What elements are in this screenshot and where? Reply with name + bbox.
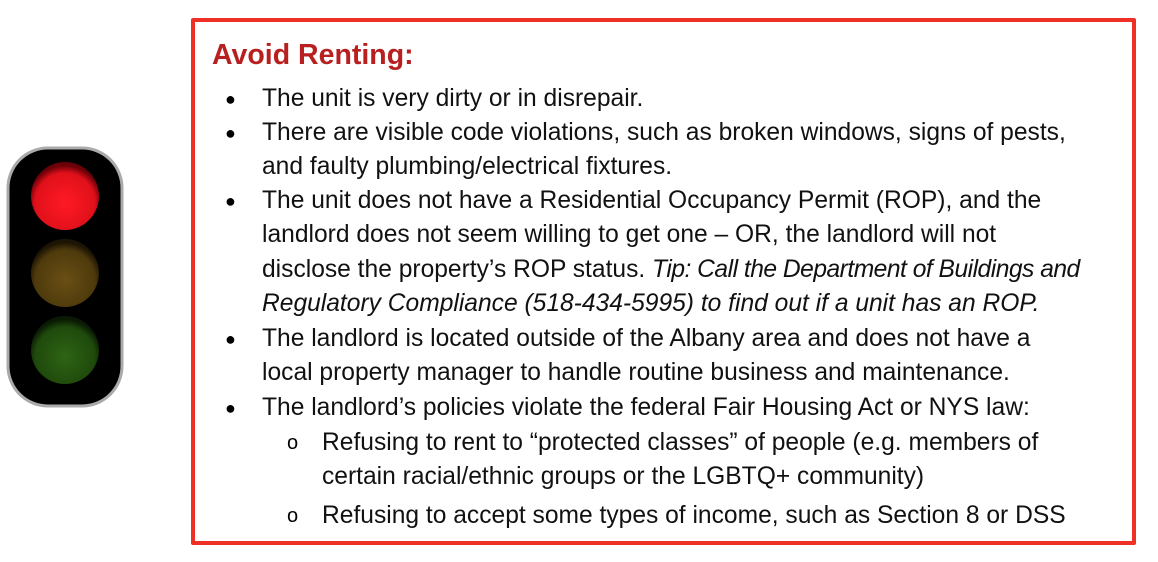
text block: bullet list: ●	[225, 398, 236, 418]
text block: bullet list: local property manager to handle routine business and maintenance.	[262, 359, 1010, 386]
text block: bullet list: ●	[225, 123, 236, 143]
text block: bullet list: There are visible code violations, such as broken windows, signs of pests,	[262, 119, 1066, 146]
text block: bullet list: o	[287, 432, 298, 454]
text block: bullet list: Regulatory Compliance (518-434-5995) to find out if a unit has an ROP.	[262, 290, 1039, 317]
text block: bullet list: The unit is very dirty or in disrepair.	[262, 85, 643, 112]
text block: bullet list: Refusing to accept some types of income, such as Section 8 or DSS	[322, 502, 1066, 529]
text block: bullet list: ●	[225, 329, 236, 349]
text block: bullet list: certain racial/ethnic groups or the LGBTQ+ community)	[322, 463, 924, 490]
text block: bullet list: and faulty plumbing/electrical fixtures.	[262, 153, 672, 180]
panel: avoid renting	[191, 18, 1136, 545]
text block: bullet list: ●	[225, 191, 236, 211]
text block: bullet list: The landlord’s policies violate the federal Fair Housing Act or NYS law:	[262, 394, 1030, 421]
text block: bullet list: The unit does not have a Residential Occupancy Permit (ROP), and the	[262, 187, 1041, 214]
title: Avoid Renting:	[212, 39, 414, 71]
text block: bullet list: o	[287, 505, 298, 527]
text block: bullet list: The landlord is located outside of the Albany area and does not have a	[262, 325, 1030, 352]
icon: traffic light	[6, 146, 124, 408]
text block: bullet list: disclose the property’s ROP status. Tip: Call the Department of Buildings and	[262, 256, 1080, 283]
text block: bullet list: Refusing to rent to “protected classes” of people (e.g. members of	[322, 429, 1038, 456]
text block: bullet list: ●	[225, 89, 236, 109]
text block: bullet list: landlord does not seem willing to get one – OR, the landlord will not	[262, 221, 996, 248]
